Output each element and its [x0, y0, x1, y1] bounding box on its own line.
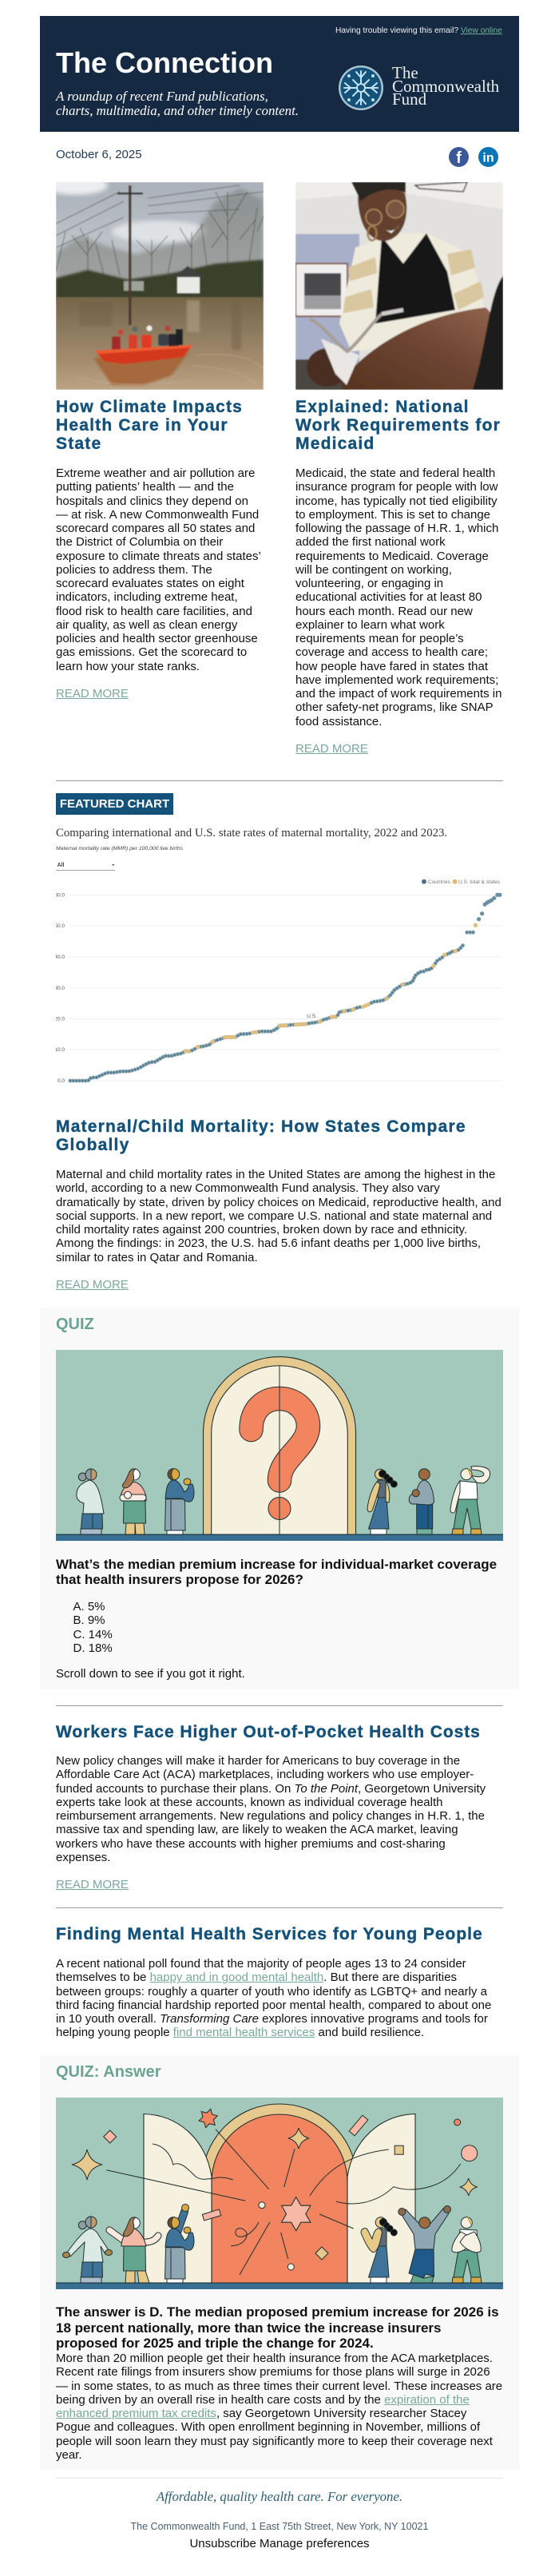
workers article text: experts take look at these accounts, known as individual coverage health — [56, 1796, 442, 1809]
logo wordmark: The — [392, 63, 418, 82]
climate article text: flood risk to health care facilities, and — [56, 604, 252, 618]
mental health article text: themselves to be happy and in good mental health. But there are disparities — [56, 1971, 457, 1984]
answer headline — [56, 2304, 499, 2351]
answer headline: 18 percent nationally, more than twice the increase insurers — [56, 2320, 441, 2336]
climate article text: indicators, including extreme heat, — [56, 590, 238, 604]
workers article text — [56, 1754, 486, 1864]
answer headline: The answer is D. The median proposed premium increase for 2026 is — [56, 2304, 499, 2320]
subtitle: A roundup of recent Fund publications, — [56, 89, 268, 104]
answer text: — in some states, to as much as three times their current level. These increases are — [56, 2379, 502, 2393]
panel: quiz answer — [40, 2055, 519, 2470]
climate article text: gas emissions. Get the scorecard to — [56, 645, 247, 659]
medicaid article text: volunteering, or engaging in — [295, 577, 443, 590]
heading: workers: Workers Face Higher Out-of-Pocket Health Costs — [56, 1723, 481, 1741]
photo: clinician with patient — [295, 182, 503, 390]
heading: mental health: Finding Mental Health Services for Young People — [56, 1925, 483, 1943]
heading: work requirements — [295, 398, 501, 453]
view online note: Having trouble viewing this email? View online — [335, 26, 502, 35]
logo wordmark — [392, 63, 499, 109]
medicaid article text: following the passage of H.R. 1, which — [295, 522, 498, 535]
workers article text: massive tax and spending law, are likely to weaken the ACA market, leaving — [56, 1823, 458, 1836]
medicaid article text: requirements to Medicaid. Coverage — [295, 550, 489, 562]
answer options: C. 14% — [73, 1628, 113, 1641]
quiz question: What’s the median premium increase for individual-market coverage — [56, 1557, 497, 1572]
climate article text — [56, 466, 261, 673]
climate article text: the District of Columbia on their — [56, 535, 223, 549]
medicaid article text: coverage and access to health care; — [295, 645, 488, 659]
address: The Commonwealth Fund, 1 East 75th Street, New York, NY 10021 — [131, 2521, 428, 2532]
legend — [422, 879, 501, 885]
climate article text: scorecard evaluates states on eight — [56, 577, 244, 590]
quiz prompt: Scroll down to see if you got it right. — [56, 1667, 245, 1681]
quiz question: that health insurers propose for 2026? — [56, 1572, 303, 1587]
chart subtitle: Maternal mortality rate (MMR) per 100,000 live births — [56, 846, 184, 851]
confetti — [72, 2107, 478, 2275]
illustration: door with question mark — [56, 1350, 503, 1541]
medicaid article text: how people have fared in states that — [295, 660, 488, 673]
answer text: year. — [56, 2448, 82, 2462]
heading: work requirements: Work Requirements for — [295, 416, 501, 435]
workers article text: workers who have these accounts with higher premiums and cost-sharing — [56, 1837, 446, 1850]
answer options — [73, 1600, 113, 1655]
climate article text: hospitals and clinics they depend on — [56, 494, 248, 508]
medicaid article text: to employment. This is set to change — [295, 508, 490, 522]
chart title: Comparing international and U.S. state rates of maternal mortality, 2022 and 2023. — [56, 827, 447, 839]
read more link: READ MORE — [56, 1878, 129, 1891]
mental health article text: A recent national poll found that the majority of people ages 13 to 24 consider — [56, 1957, 466, 1971]
question mark — [251, 1399, 308, 1481]
featured chart badge — [56, 793, 173, 815]
mental health article text — [56, 1957, 491, 2039]
icon: linkedin — [478, 147, 498, 167]
y axis labels: 0.0 — [57, 1078, 65, 1084]
heading: maternal mortality — [56, 1117, 466, 1154]
read more link: READ MORE — [295, 742, 368, 756]
maternal article text: Among the findings: in 2023, the U.S. had 5.6 infant deaths per 1,000 live births, — [56, 1236, 481, 1250]
medicaid article text: other safety-net programs, like SNAP — [295, 701, 494, 714]
title: The Connection — [56, 46, 273, 79]
mental health article text: in 10 youth overall. Transforming Care explores innovative programs and tools for — [56, 2012, 488, 2026]
workers article text: expenses. — [56, 1851, 110, 1864]
person 5 — [409, 1469, 434, 1534]
person 2 — [120, 1469, 146, 1534]
climate article text: policies and health sector greenhouse — [56, 632, 258, 645]
photo: flood rescue boat — [56, 182, 264, 390]
maternal article text — [56, 1168, 502, 1264]
heading: climate: Health Care in Your — [56, 416, 228, 435]
climate article text: exposure to climate threats and states’ — [56, 550, 261, 562]
y axis labels — [54, 893, 65, 1084]
subtitle — [55, 89, 299, 118]
answer text: being driven by an overall rise in health care costs and by the expiration of the — [56, 2393, 470, 2407]
medicaid article text: income, has typically not tied eligibility — [295, 494, 498, 508]
heading: maternal mortality: Globally — [56, 1136, 129, 1154]
medicaid article text: and the impact of work requirements in — [295, 687, 502, 701]
answer options: B. 9% — [73, 1613, 105, 1627]
people celebrating — [62, 2205, 482, 2283]
maternal article text: social supports. In a new report, we compare U.S. national and state maternal and — [56, 1209, 492, 1223]
icon: facebook — [449, 147, 469, 167]
icon: linkedin: in — [482, 152, 494, 165]
climate article text: Extreme weather and air pollution are — [56, 466, 255, 480]
answer text: people will soon learn they must pay significantly more to keep their coverage next — [56, 2435, 493, 2447]
footer links: Unsubscribe Manage preferences — [189, 2537, 370, 2550]
logo — [339, 65, 383, 110]
dropdown — [56, 863, 115, 871]
person 3 — [165, 1469, 194, 1534]
panel: quiz — [40, 1308, 519, 1689]
logo wordmark: Commonwealth — [392, 77, 499, 96]
answer text: More than 20 million people get their health insurance from the ACA marketplaces. — [56, 2352, 493, 2365]
answer text: Pogue and colleagues. With open enrollment beginning in November, millions of — [56, 2420, 480, 2434]
mental health article text: third facing financial hardship reported poor mental health, compared to about one — [56, 1998, 491, 2012]
read more link: READ MORE — [56, 1278, 129, 1292]
legend: Countries — [428, 879, 451, 885]
maternal article text: child mortality rates against 200 countries, broken down by race and ethnicity. — [56, 1223, 467, 1236]
medicaid article text: hours each month. Read our new — [295, 604, 473, 618]
medicaid article text: will be contingent on working, — [295, 563, 452, 577]
featured chart badge: FEATURED CHART — [60, 797, 169, 811]
logo wordmark: Fund — [392, 89, 426, 109]
quiz label: QUIZ — [56, 1316, 94, 1333]
climate article text: air quality, as well as clean energy — [56, 618, 237, 632]
quiz question — [56, 1557, 497, 1587]
medicaid article text: added the first national work — [295, 535, 446, 549]
header banner — [40, 16, 519, 132]
medicaid article text: requirements mean for people’s — [295, 632, 464, 645]
medicaid article text: Medicaid, the state and federal health — [295, 466, 495, 480]
subtitle: charts, multimedia, and other timely content. — [56, 103, 299, 118]
quiz answer label: QUIZ: Answer — [56, 2063, 161, 2081]
heading: climate: State — [56, 435, 101, 453]
workers article text: New policy changes will make it harder for Americans to buy coverage in the — [56, 1754, 460, 1768]
illustration: open door — [56, 2098, 503, 2289]
answer text: enhanced premium tax credits, say Georgetown University researcher Stacey — [56, 2407, 466, 2420]
answer options: A. 5% — [73, 1600, 105, 1613]
climate article text: policies to address them. The — [56, 563, 212, 577]
heading: maternal mortality: Maternal/Child Mortality: How States Compare — [56, 1117, 466, 1136]
maternal article text: dramatically by state, driven by policy choices on Medicaid, reproductive health, and — [56, 1195, 502, 1209]
answer text: Recent rate filings from insurers show premiums for those plans will surge in 2026 — [56, 2365, 490, 2379]
medicaid article text: explainer to learn what work — [295, 618, 445, 632]
country dots — [70, 932, 474, 1081]
medicaid article text — [295, 466, 502, 728]
climate article text: learn how your state ranks. — [56, 660, 200, 673]
answer headline: proposed for 2025 and triple the change for 2024. — [56, 2336, 374, 2351]
workers article text: Affordable Care Act (ACA) marketplaces, including workers who use employer- — [56, 1768, 474, 1781]
dot chart: maternal mortality — [56, 827, 502, 1084]
medicaid article text: insurance program for people with low — [295, 480, 498, 494]
heading: work requirements: Explained: National — [295, 398, 470, 416]
mental health article text: between groups: roughly a quarter of youth who identify as LGBTQ+ and nearly a — [56, 1984, 487, 1998]
answer text — [56, 2352, 502, 2462]
answer options: D. 18% — [73, 1641, 113, 1655]
medicaid article text: educational activities for at least 80 — [295, 590, 482, 604]
medicaid article text: food assistance. — [295, 714, 382, 728]
climate article text: putting patients’ health — and the — [56, 480, 234, 494]
workers article text: reimbursement arrangements. New regulations and policy changes in H.R. 1, the — [56, 1809, 485, 1823]
climate article text: — at risk. A new Commonwealth Fund — [56, 508, 259, 522]
person 4 — [367, 1469, 397, 1534]
tagline: Affordable, quality health care. For everyone. — [157, 2489, 402, 2504]
read more link: READ MORE — [56, 687, 129, 701]
heading: climate — [56, 398, 243, 453]
workers article text: funded accounts to purchase their plans. On To the Point, Georgetown University — [56, 1781, 486, 1796]
U.S. state dots — [185, 984, 406, 1051]
medicaid article text: have implemented work requirements; — [295, 673, 498, 687]
mental health article text: helping young people find mental health services and build resilience. — [56, 2026, 424, 2039]
legend: U.S. total & states — [458, 879, 501, 885]
climate article text: scorecard compares all 50 states and — [56, 522, 255, 535]
icon: facebook: f — [456, 149, 462, 167]
date: October 6, 2025 — [56, 148, 142, 161]
maternal article text: similar to rates in Qatar and Romania. — [56, 1251, 258, 1264]
dropdown: All — [57, 863, 64, 868]
maternal article text: world, according to a new Commonwealth Fund analysis. They also vary — [56, 1181, 440, 1195]
heading: work requirements: Medicaid — [295, 435, 375, 453]
maternal article text: Maternal and child mortality rates in the United States are among the highest in the — [56, 1168, 495, 1181]
U.S. callout: U.S. — [307, 1014, 317, 1019]
heading: climate: How Climate Impacts — [56, 398, 243, 416]
person 1 — [77, 1469, 104, 1534]
person 6 — [450, 1467, 490, 1534]
